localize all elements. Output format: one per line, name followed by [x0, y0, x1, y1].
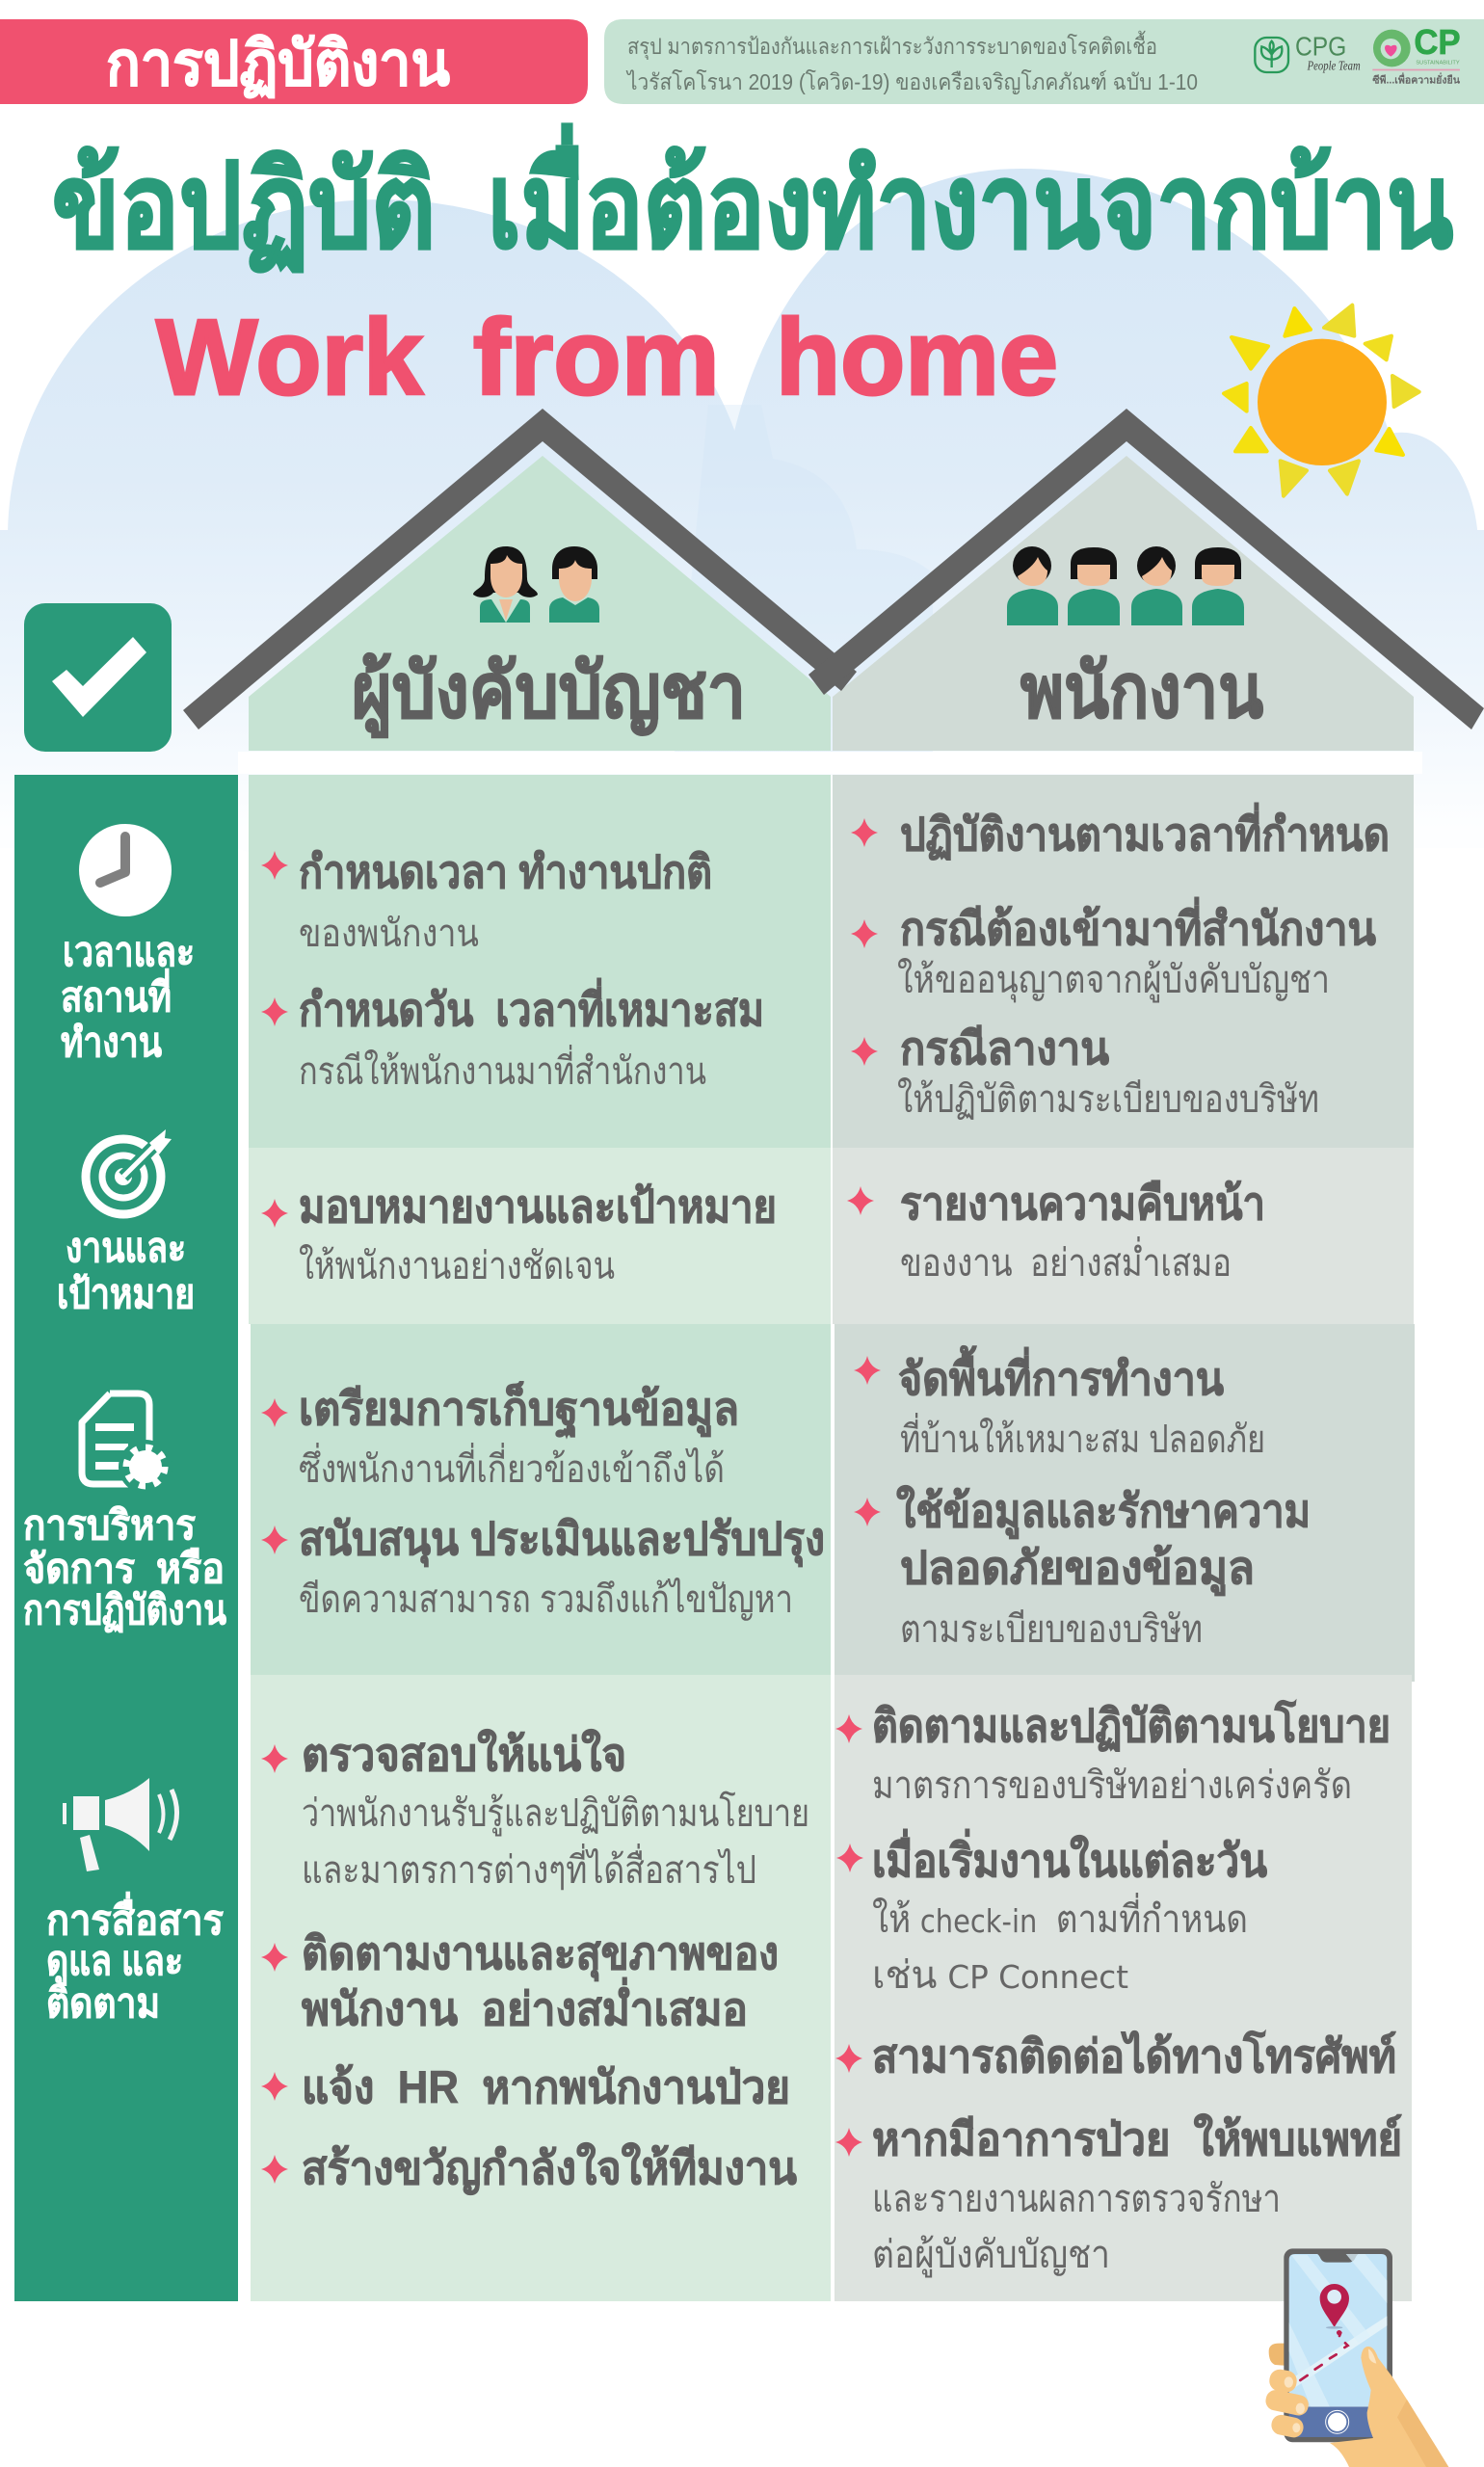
label: work and goals: [57, 1225, 195, 1316]
icon: target: [86, 1129, 172, 1214]
label: time and place: ทำงาน: [61, 1020, 162, 1065]
employee: work and goals: ของงาน อย่างสม่ำเสมอ: [900, 1236, 1232, 1285]
manager: communication: ว่าพนักงานรับรู้และปฏิบัติตามนโยบาย: [302, 1791, 809, 1836]
label: work and goals: งานและ: [66, 1225, 186, 1270]
manager: time and place: กำหนดเวลา ทำงานปกติ: [299, 846, 712, 897]
manager: management: ซึ่งพนักงานที่เกี่ยวข้องเข้าถึงได้: [299, 1443, 725, 1491]
manager: communication: [261, 1728, 809, 2195]
panel: employee column: [833, 775, 1415, 2301]
employee: management: ปลอดภัยของข้อมูล: [900, 1542, 1255, 1597]
logo: CP for sustainability: SUSTAINABILITY: [1416, 60, 1460, 66]
header banner: summary and logos: ไวรัสโคโรนา 2019 (โควิด-19) ของเครือเจริญโภคภัณฑ์ ฉบับ 1-10: [625, 69, 1198, 94]
manager: management: ขีดความสามารถ รวมถึงแก้ไขปัญหา: [299, 1578, 793, 1621]
employee: communication: ต่อผู้บังคับบัญชา: [872, 2234, 1110, 2277]
employee: communication: สามารถติดต่อได้ทางโทรศัพท์: [872, 2029, 1396, 2082]
manager: time and place: กรณีให้พนักงานมาที่สำนักงาน: [299, 1045, 706, 1093]
icon: megaphone: [63, 1778, 177, 1871]
employee: time and place: ปฏิบัติงานตามเวลาที่กำหนด: [900, 802, 1390, 860]
label: management: [23, 1502, 226, 1632]
manager: work and goals: ให้พนักงานอย่างชัดเจน: [299, 1243, 615, 1287]
background: sky and clouds: [0, 169, 1484, 874]
panel: manager column: [249, 775, 831, 2301]
employee: management: ตามระเบียบของบริษัท: [900, 1608, 1203, 1651]
manager: management: สนับสนุน ประเมินและปรับปรุง: [299, 1513, 825, 1567]
icon: managers: [473, 546, 599, 623]
icon: clock: [79, 824, 172, 916]
label: work and goals: เป้าหมาย: [57, 1271, 195, 1316]
label: communication: ติดตาม: [46, 1980, 160, 2026]
manager: communication: ติดตามงานและสุขภาพของ: [302, 1927, 779, 1981]
label: management: จัดการ หรือ: [23, 1546, 225, 1591]
header banner: pink: [0, 19, 588, 104]
employee: management: จัดพื้นที่การทำงาน: [898, 1345, 1224, 1404]
manager: time and place: ของพนักงาน: [299, 913, 479, 955]
logo: CP for sustainability: ซีพี...เพื่อความยั่งยืน: [1372, 72, 1461, 87]
manager: communication: พนักงาน อย่างสม่ำเสมอ: [302, 1976, 748, 2034]
manager: work and goals: มอบหมายงานและเป้าหมาย: [299, 1180, 777, 1232]
manager: time and place: [261, 846, 764, 1093]
employee: work and goals: รายงานความคืบหน้า: [900, 1178, 1265, 1229]
employee: communication: หากมีอาการป่วย ให้พบแพทย์: [872, 2112, 1402, 2164]
label: management: การบริหาร: [23, 1502, 196, 1548]
manager: management: [261, 1380, 825, 1621]
heading: manager: ผู้บังคับบัญชา: [352, 649, 746, 738]
label: communication: การสื่อสาร: [46, 1892, 224, 1943]
manager: communication: ตรวจสอบให้แน่ใจ: [302, 1728, 626, 1780]
house: employee side: [833, 456, 1414, 751]
white band under roofs: [238, 752, 1422, 774]
label: time and place: สถานที่: [61, 968, 172, 1020]
label: management: การปฏิบัติงาน: [23, 1587, 226, 1632]
icon: sun: [1224, 305, 1419, 496]
roof: left: [183, 409, 857, 729]
manager: work and goals: [261, 1180, 777, 1287]
employee: management: [854, 1345, 1311, 1651]
subtitle: from: [473, 298, 720, 417]
label: time and place: [61, 929, 195, 1065]
manager: communication: สร้างขวัญกำลังใจให้ทีมงาน: [302, 2141, 797, 2195]
employee: time and place: [851, 802, 1390, 1121]
employee: communication: ให้ check-in ตามที่กำหนด: [872, 1893, 1248, 1941]
header banner: summary and logos: [604, 19, 1484, 104]
subtitle: [156, 298, 1058, 417]
label: communication: ดูแล และ: [46, 1938, 183, 1986]
panel: category column: [14, 775, 238, 2301]
house: manager side: [249, 456, 831, 751]
label: time and place: เวลาและ: [63, 929, 195, 974]
label: communication: [46, 1892, 224, 2026]
manager: management: เตรียมการเก็บฐานข้อมูล: [299, 1380, 739, 1439]
roof: right: [808, 409, 1484, 729]
heading: employee: พนักงาน: [1020, 649, 1263, 733]
employee: management: ที่บ้านให้เหมาะสม ปลอดภัย: [900, 1413, 1265, 1461]
employee: communication: และรายงานผลการตรวจรักษา: [872, 2178, 1281, 2220]
logo: CP for sustainability: CP: [1414, 22, 1461, 62]
employee: time and place: กรณีต้องเข้ามาที่สำนักงาน: [900, 896, 1376, 954]
employee: communication: เช่น CP Connect: [872, 1954, 1128, 1997]
icon: employees: [1007, 546, 1244, 625]
employee: time and place: ให้ขออนุญาตจากผู้บังคับบัญชา: [897, 957, 1330, 1003]
employee: time and place: กรณีลางาน: [900, 1022, 1109, 1074]
subtitle: home: [776, 298, 1058, 417]
manager: communication: และมาตรการต่างๆที่ได้สื่อสารไป: [302, 1844, 756, 1892]
header banner: pink: การปฏิบัติงาน: [106, 29, 450, 98]
checkmark badge: [24, 603, 172, 752]
employee: communication: มาตรการของบริษัทอย่างเคร่งครัด: [872, 1764, 1352, 1807]
icon: document with gear: [82, 1393, 172, 1494]
logo: CPG People Team: CPG: [1295, 31, 1346, 61]
manager: communication: แจ้ง HR หากพนักงานป่วย: [302, 2061, 790, 2112]
logo: CPG People Team: [1255, 31, 1361, 73]
header banner: summary and logos: สรุป มาตรการป้องกันและการเฝ้าระวังการระบาดของโรคติดเชื้อ: [627, 31, 1157, 60]
illustration: hand holding phone with map: [1264, 2248, 1448, 2467]
employee: time and place: ให้ปฏิบัติตามระเบียบของบริษัท: [897, 1076, 1319, 1121]
logo: CP for sustainability: [1372, 22, 1461, 87]
title: [52, 123, 1453, 273]
manager: time and place: กำหนดวัน เวลาที่เหมาะสม: [299, 977, 764, 1035]
employee: communication: ติดตามและปฏิบัติตามนโยบาย: [872, 1699, 1391, 1751]
logo: CPG People Team: People Team: [1307, 59, 1361, 73]
employee: work and goals: [847, 1178, 1265, 1285]
title: ข้อปฏิบัติ: [52, 141, 436, 273]
employee: communication: [835, 1699, 1402, 2277]
employee: management: ใช้ข้อมูลและรักษาความ: [896, 1484, 1311, 1540]
subtitle: Work: [156, 298, 423, 417]
employee: communication: เมื่อเริ่มงานในแต่ละวัน: [872, 1828, 1267, 1886]
